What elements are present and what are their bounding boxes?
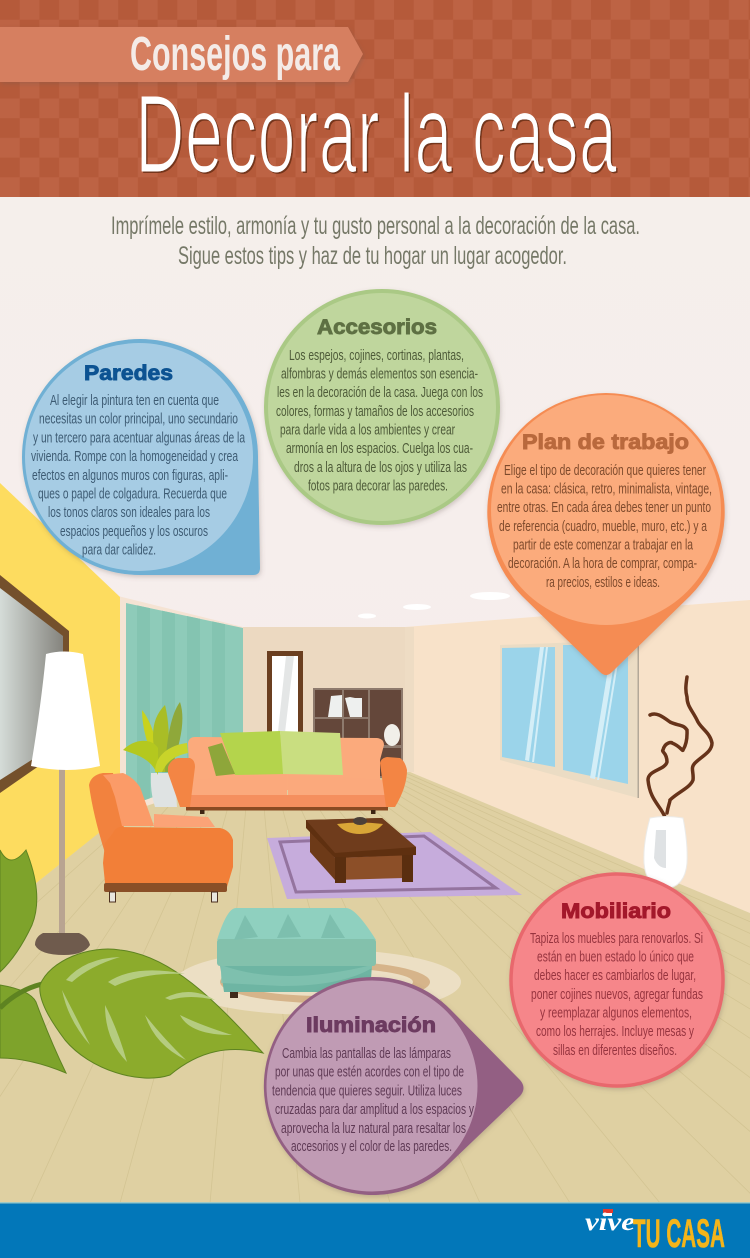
curtain — [126, 600, 244, 805]
panel: Paredes — [22, 339, 260, 575]
seat — [190, 775, 287, 795]
bubble shape — [266, 291, 498, 523]
shelf vase — [384, 724, 400, 746]
potted plant — [123, 702, 188, 807]
body text: Los espejos, cojines, cortinas, plantas, — [289, 347, 464, 364]
green cushions — [220, 731, 285, 775]
yellow wall — [0, 483, 120, 912]
bookshelf — [313, 688, 403, 778]
body text: los tonos claros son ideales para los — [48, 504, 210, 521]
bubble shape — [487, 393, 725, 675]
body text: fotos para decorar las paredes. — [308, 478, 448, 494]
side wall behind curtain — [118, 596, 247, 820]
floor — [0, 772, 750, 1202]
bowl — [337, 822, 383, 834]
round rug — [175, 949, 461, 1015]
panel: Accesorios — [266, 291, 498, 523]
bubble shape — [264, 977, 524, 1195]
bubble shape — [22, 339, 260, 575]
heading: Plan de trabajo — [522, 431, 689, 454]
kicker title: Consejos para — [130, 28, 340, 81]
body text: armonía en los espacios. Cuelga los cua- — [286, 440, 473, 457]
heading: Accesorios — [317, 316, 437, 339]
sofa — [168, 731, 407, 814]
chair back light — [103, 773, 154, 826]
body text: dros a la altura de los ojos y utiliza las — [294, 459, 467, 476]
body text — [272, 1045, 474, 1155]
logo script: vive — [585, 1209, 635, 1236]
chair back dark side — [89, 773, 125, 853]
large leaves — [0, 850, 263, 1078]
ribbon — [0, 27, 363, 82]
body text — [497, 462, 712, 591]
logo: vive tu casa — [585, 1209, 725, 1256]
body text: Cambia las pantallas de las lámparas — [282, 1045, 451, 1062]
body text: tendencia que quieres seguir. Utiliza luces — [272, 1082, 462, 1099]
sofa arms — [168, 758, 195, 807]
panel: Plan de trabajo — [487, 393, 725, 675]
sofa back — [188, 737, 384, 790]
coffee table — [306, 817, 416, 883]
logo house icon — [603, 1209, 613, 1216]
body text: accesorios y el color de las paredes. — [291, 1138, 452, 1155]
body text — [276, 347, 483, 494]
floor lamp — [31, 652, 100, 955]
back wall — [243, 627, 413, 790]
living room illustration — [0, 483, 750, 1203]
body text: espacios pequeños y los oscuros — [60, 523, 208, 540]
body text: ques o papel de colgadura. Recuerda que — [38, 486, 227, 502]
body text: necesitas un color principal, uno secundario — [39, 411, 238, 428]
body text: aprovecha la luz natural para resaltar los — [281, 1120, 466, 1137]
body text: alfombras y demás elementos son esencia- — [281, 366, 478, 383]
ottoman — [217, 908, 376, 998]
body text: ra precios, estilos e ideas. — [546, 574, 660, 591]
heading: Mobiliario — [561, 900, 671, 923]
wall mirror — [0, 575, 69, 793]
body text: vivienda. Rompe con la homogeneidad y crea — [31, 448, 238, 465]
right wall — [405, 600, 750, 913]
bubble shape — [511, 874, 723, 1086]
body text: colores, formas y tamaños de los accesorios — [276, 403, 474, 420]
purple rug — [267, 832, 522, 899]
chair rear seat — [154, 814, 215, 827]
window — [500, 640, 639, 798]
body text: para darle vida a los ambientes y crear — [280, 422, 455, 439]
body text: para dar calidez. — [82, 542, 156, 559]
door mirror — [267, 651, 303, 741]
ceiling lights — [358, 592, 510, 618]
body text: les en la decoración de la casa. Juega con los — [277, 384, 483, 401]
panel: Mobiliario — [511, 874, 723, 1086]
decorative vase and branches — [644, 677, 712, 889]
body text: efectos en algunos muros con figuras, apli- — [32, 467, 228, 484]
body text — [31, 392, 245, 559]
intro text — [111, 212, 640, 270]
body text: y un tercero para acentuar algunas áreas de la — [33, 429, 245, 446]
body text: cruzadas para dar amplitud a los espacios y — [275, 1101, 474, 1118]
body text: por unas que estén acordes con el tipo de — [275, 1064, 464, 1081]
heading: Paredes — [84, 362, 173, 385]
body text — [530, 930, 703, 1059]
books — [328, 695, 362, 717]
body text: sillas en diferentes diseños. — [553, 1042, 677, 1059]
footer bar — [0, 1202, 750, 1258]
heading: Iluminación — [306, 1014, 436, 1037]
sofa base — [186, 807, 388, 810]
body text: Al elegir la pintura ten en cuenta que — [50, 392, 219, 409]
armchair — [89, 773, 233, 902]
chair body — [103, 827, 233, 887]
header band — [0, 0, 750, 197]
panel: Iluminación — [264, 977, 524, 1195]
